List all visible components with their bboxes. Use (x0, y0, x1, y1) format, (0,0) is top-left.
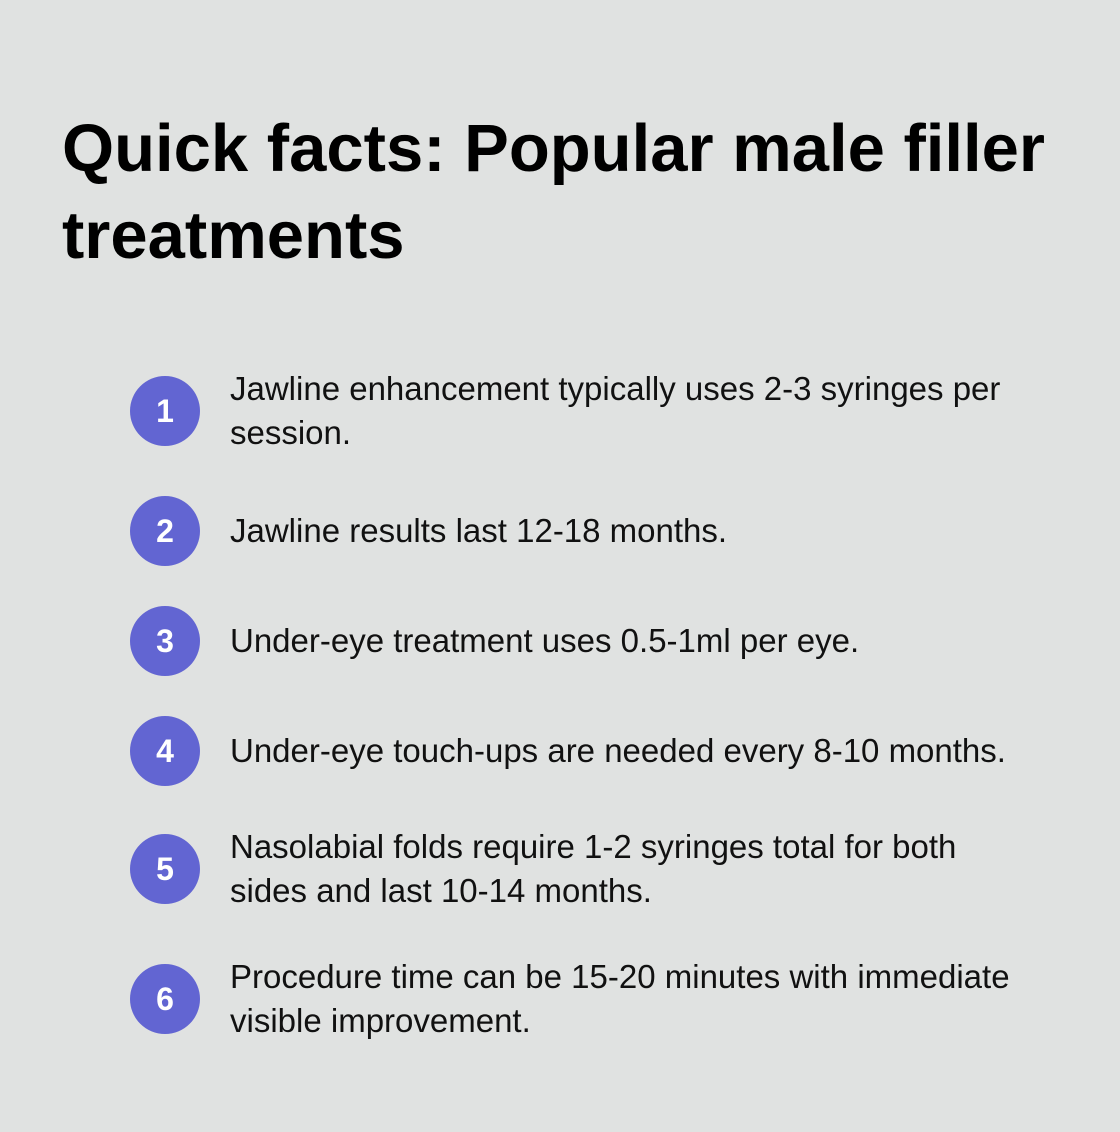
item 6: 6 (156, 980, 174, 1016)
item 5: Nasolabial folds require 1-2 syringes total for both sides and last 10-14 months. (230, 828, 956, 909)
item 2: Jawline results last 12-18 months. (230, 512, 727, 549)
item 1: Jawline enhancement typically uses 2-3 syringes per session. (230, 370, 1000, 451)
item 4: 4 (156, 732, 174, 768)
item 4: Under-eye touch-ups are needed every 8-10 months. (230, 732, 1006, 769)
item 6: Procedure time can be 15-20 minutes with immediate visible improvement. (230, 958, 1010, 1039)
item 3: 3 (156, 622, 174, 658)
title: Quick facts: Popular male filler treatments (62, 111, 1045, 273)
item 5: 5 (156, 850, 174, 886)
item 1: 1 (156, 392, 174, 428)
item 2: 2 (156, 512, 174, 548)
item 3 (130, 606, 859, 676)
item 2 (130, 496, 727, 566)
item 3: Under-eye treatment uses 0.5-1ml per eye. (230, 622, 859, 659)
item 4 (130, 716, 1006, 786)
